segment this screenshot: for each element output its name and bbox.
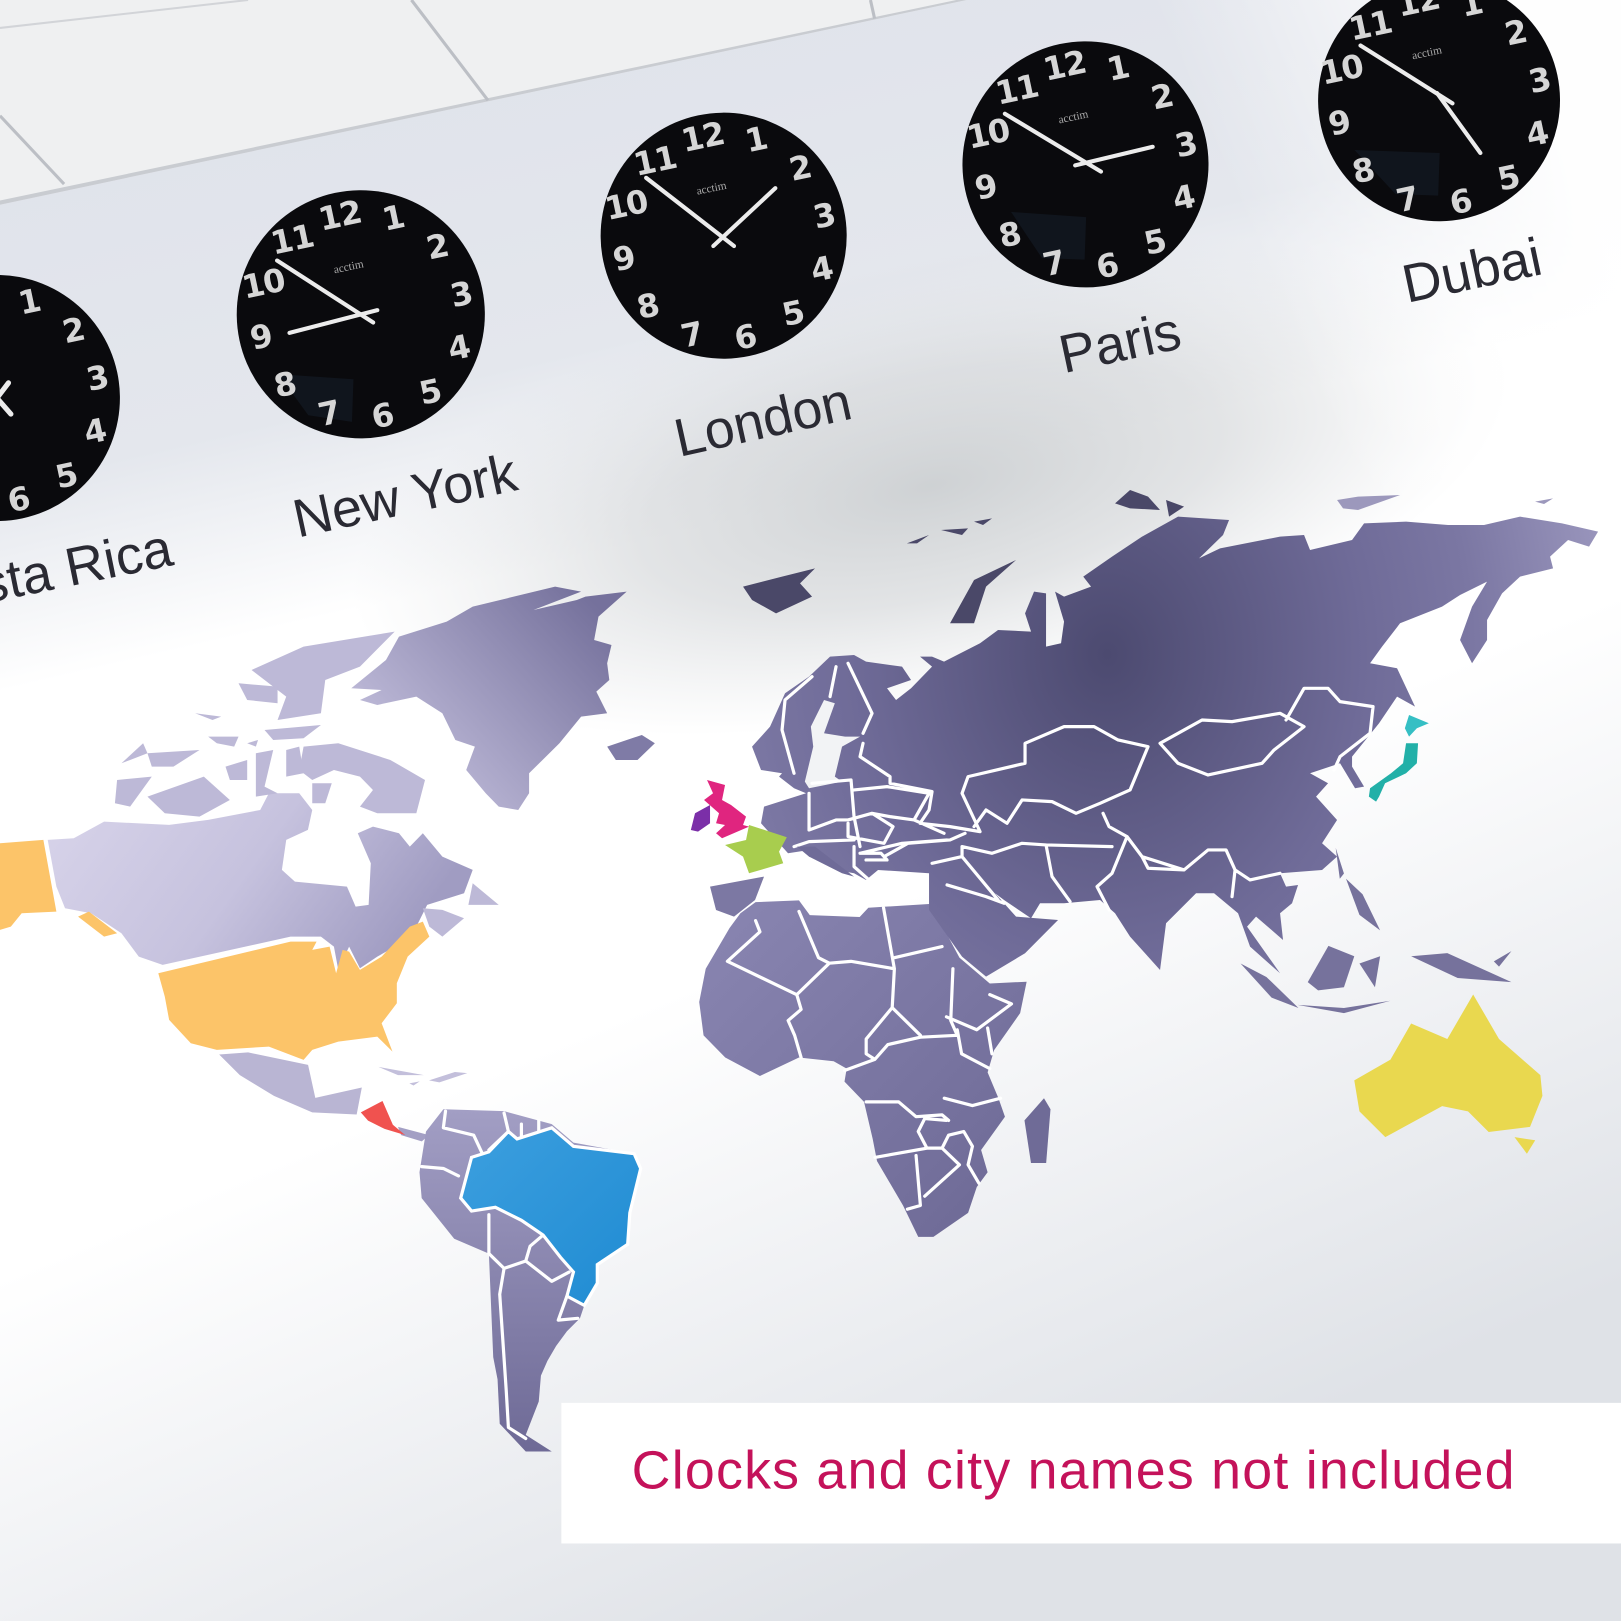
- clock: Costa Rica: 1: [15, 281, 44, 322]
- clock: Dubai: 11: [1346, 2, 1395, 48]
- clock: Dubai: 10: [1317, 47, 1366, 93]
- south america borders: [422, 1111, 578, 1439]
- clock: Dubai: 8: [1349, 150, 1377, 191]
- highlighted: United Kingdom: [704, 780, 749, 838]
- clock: New York: 6: [368, 395, 397, 437]
- highlighted: Ireland: [691, 805, 710, 832]
- clock: London: 8: [633, 285, 662, 327]
- clock: Paris: 10: [963, 111, 1013, 157]
- world map: [0, 490, 1598, 1451]
- canadian arctic islands: [115, 632, 499, 937]
- south america and africa: [419, 900, 1050, 1451]
- clock: New York: 3: [447, 274, 476, 315]
- clock: New York: 5: [416, 371, 444, 413]
- clock: London: 12: [678, 114, 727, 160]
- clock: London: acctim: [695, 180, 728, 198]
- clock: Costa Rica: 2: [59, 310, 88, 351]
- africa borders: [727, 908, 1011, 1209]
- clock: London: 1: [742, 119, 770, 160]
- clock: London: 9: [609, 238, 638, 279]
- city label: London: London: [669, 371, 857, 469]
- clock: Paris: 8: [995, 214, 1024, 256]
- clock: Costa Rica: 4: [81, 411, 109, 452]
- clock: Costa Rica: [0, 252, 143, 544]
- central america and caribbean: [219, 1052, 467, 1141]
- clock: New York: 4: [444, 327, 473, 369]
- highlighted: Costa Rica: [361, 1101, 405, 1135]
- clock: New York: 9: [247, 316, 275, 358]
- city label: New York: New York: [288, 443, 522, 549]
- highlighted: Brazil: [461, 1128, 641, 1305]
- central america strip: [398, 1127, 429, 1141]
- clock: New York: 7: [315, 393, 343, 434]
- clock: New York: acctim: [333, 258, 365, 276]
- clock: Paris: 2: [1148, 76, 1176, 117]
- arctic islands of europe and asia: [743, 490, 1184, 623]
- clock: London: 3: [810, 195, 838, 237]
- clock: New York: 10: [239, 261, 288, 307]
- clock: Paris: 7: [1039, 243, 1068, 284]
- mexico: [219, 1052, 362, 1114]
- city label: Dubai: Dubai: [1397, 227, 1547, 315]
- usa: [158, 922, 429, 1060]
- clock: Paris: 3: [1172, 124, 1200, 165]
- clock: New York: 8: [271, 364, 299, 405]
- clock: New York: 2: [423, 226, 452, 267]
- ceiling tiles: [0, 0, 967, 205]
- tasmania: [1515, 1137, 1535, 1154]
- clock: London: 10: [601, 182, 651, 228]
- clock: Paris: 6: [1093, 245, 1121, 287]
- clock: London: 5: [779, 293, 807, 334]
- clock: Dubai: 5: [1494, 157, 1523, 199]
- spain and portugal: [710, 877, 764, 917]
- highlighted: Japan: [1369, 715, 1429, 802]
- clock: London: [578, 90, 870, 382]
- clock: London: 11: [630, 138, 680, 184]
- clock: New York: 11: [267, 216, 317, 262]
- clock: Dubai: 3: [1525, 60, 1554, 101]
- clock: Paris: 1: [1104, 47, 1132, 89]
- clock: Dubai: 4: [1523, 113, 1551, 155]
- clock: New York: [214, 167, 508, 461]
- highlighted: Australia: [1354, 995, 1542, 1137]
- clock: Paris: 4: [1169, 177, 1198, 219]
- clock: New York: 1: [379, 197, 408, 239]
- clock: Paris: 12: [1040, 43, 1089, 89]
- caption text: Clocks and city names not included: [632, 1441, 1515, 1501]
- clock: London: 7: [678, 314, 706, 356]
- clock: New York: 12: [315, 193, 365, 239]
- clock: Dubai: acctim: [1411, 44, 1443, 62]
- clock: London: 6: [731, 316, 760, 358]
- cuba and islands: [378, 1067, 467, 1085]
- clock: London: 2: [786, 147, 815, 189]
- iceland: [607, 735, 655, 760]
- greenland: [351, 587, 627, 810]
- clock: Costa Rica: 5: [52, 455, 81, 496]
- africa: [699, 900, 1027, 1237]
- siberian islands: [1337, 495, 1553, 510]
- clock: Dubai: 9: [1325, 102, 1354, 144]
- clock: Paris: 11: [992, 67, 1041, 113]
- clock: Dubai: [1296, 0, 1583, 245]
- clock: London: 4: [807, 248, 836, 290]
- south-east asia and oceania: [1241, 848, 1542, 1154]
- caption box: [561, 1403, 1621, 1543]
- clock: Dubai: 2: [1501, 12, 1530, 53]
- highlighted: France: [725, 825, 787, 873]
- clock: Paris: 5: [1140, 221, 1169, 263]
- city label: Paris: Paris: [1054, 301, 1186, 385]
- clock: Paris: [940, 18, 1231, 310]
- clock: Paris: acctim: [1057, 108, 1090, 126]
- madagascar: [1024, 1098, 1050, 1163]
- south america: [419, 1109, 641, 1451]
- italy: [797, 847, 854, 877]
- eurasia landmass: [752, 517, 1598, 977]
- alaska: [0, 840, 117, 937]
- clock: Paris: 9: [971, 166, 1000, 208]
- clock: Dubai: 7: [1393, 179, 1422, 220]
- eurasia: [691, 490, 1598, 977]
- clock: Dubai: 6: [1446, 181, 1475, 223]
- canada: [48, 793, 473, 970]
- clock: Costa Rica: 6: [4, 479, 33, 520]
- eurasia borders: [782, 663, 1373, 910]
- north america and arctic: [0, 587, 655, 1060]
- baltic sea: [805, 700, 860, 788]
- clock: Costa Rica: 3: [83, 357, 112, 399]
- islands of south-east asia: [1241, 848, 1511, 1013]
